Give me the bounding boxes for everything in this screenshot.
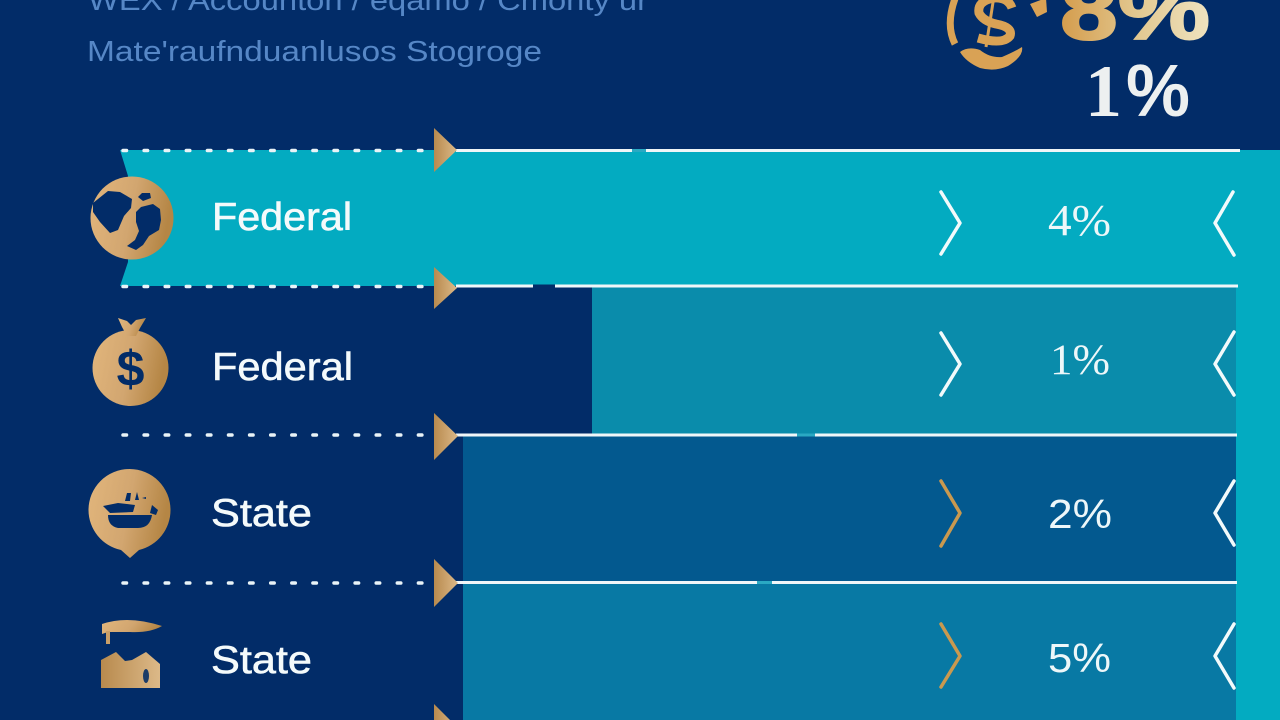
band: row 2 xyxy=(592,286,1236,435)
chevron left xyxy=(1215,481,1234,545)
band: row 1 xyxy=(120,150,1280,286)
big figure: 1%: % xyxy=(1126,49,1190,132)
icon: globe xyxy=(90,176,174,260)
value: 4% xyxy=(1048,196,1111,245)
chevron left xyxy=(1215,332,1234,395)
chevron right xyxy=(941,481,960,546)
solid dividers xyxy=(456,150,1240,582)
chevron right xyxy=(941,333,960,395)
label: State xyxy=(211,639,312,682)
row 4: State 5% xyxy=(101,620,1234,688)
row 3: State 2% xyxy=(88,469,1234,558)
label: Federal xyxy=(212,346,353,389)
chevron right xyxy=(941,624,960,687)
gold arrowheads xyxy=(434,128,458,720)
icon: food bowl pin xyxy=(88,469,171,558)
band: right column xyxy=(1236,150,1280,720)
icon: money bag xyxy=(92,318,168,406)
bands xyxy=(120,150,1280,720)
value: 5% xyxy=(1048,635,1111,681)
band: row 4 xyxy=(463,582,1236,720)
value: 2% xyxy=(1048,491,1112,537)
header text xyxy=(87,0,648,68)
header line 2: Mate'raufnduanlusos Stogroge xyxy=(87,36,542,68)
chevron left xyxy=(1215,624,1234,688)
label: State xyxy=(211,492,312,535)
icon: dollar in hand xyxy=(950,0,1047,70)
dotted dividers xyxy=(123,150,430,583)
icon: money bag: $ xyxy=(117,341,145,397)
value: 1% xyxy=(1050,337,1110,384)
row 2: Federal 1% xyxy=(92,318,1234,406)
chevron right xyxy=(941,192,960,254)
icon: graduation cap xyxy=(101,620,162,688)
big figure: 1%: 1 xyxy=(1085,51,1122,133)
band: row 3 xyxy=(463,435,1236,582)
label: Federal xyxy=(212,196,352,239)
big figure: 1% xyxy=(1085,49,1190,133)
row 1: Federal 4% xyxy=(90,176,1234,260)
chevron left xyxy=(1215,192,1234,255)
